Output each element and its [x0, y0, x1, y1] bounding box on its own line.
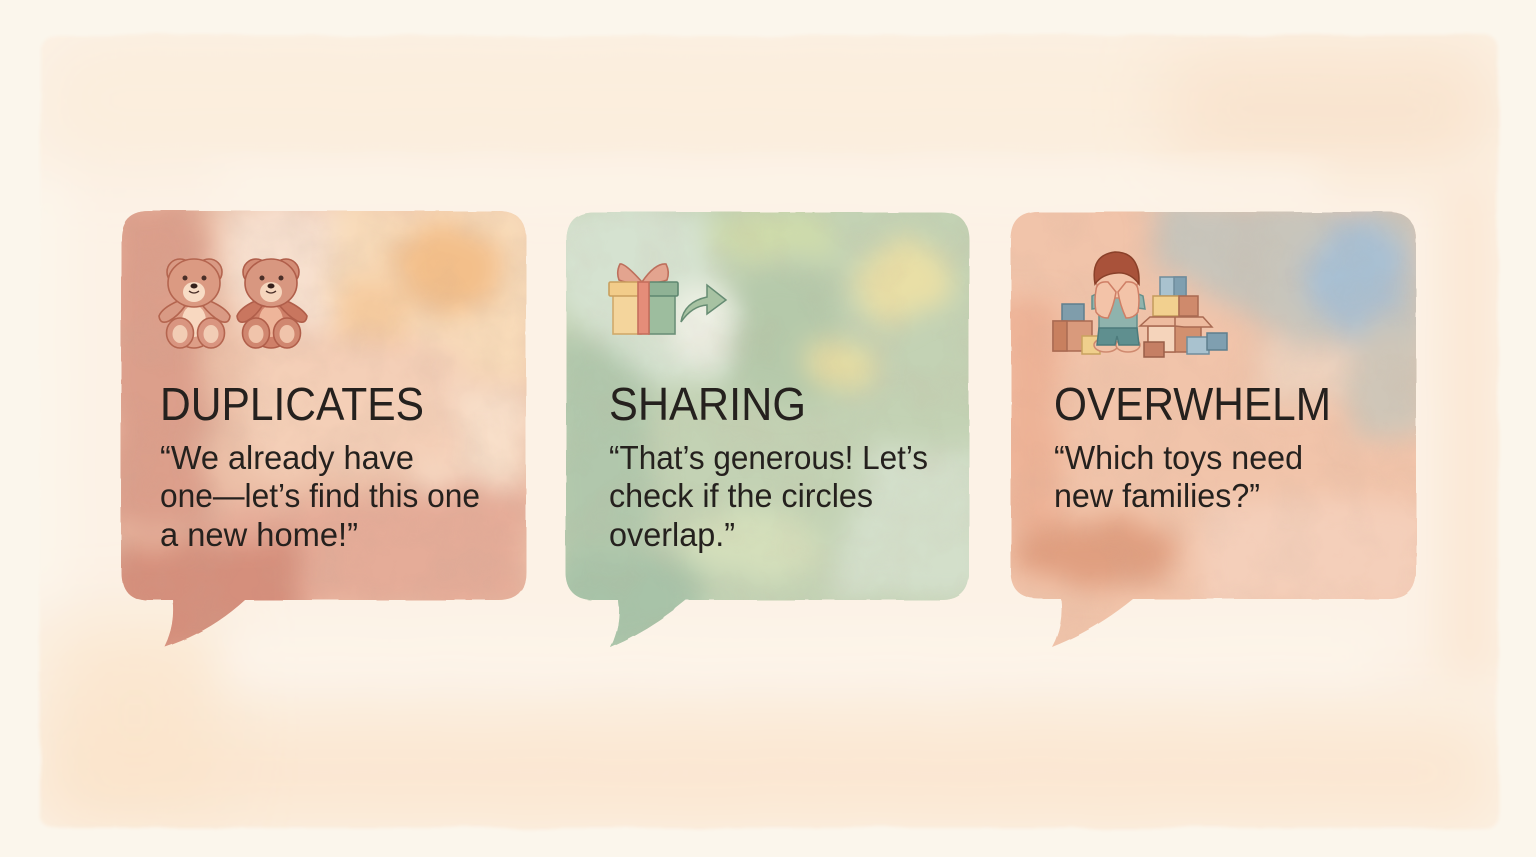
icon: left teddy bear — [159, 259, 230, 348]
heading: overwhelm: OVERWHELM — [1054, 378, 1331, 430]
icon: two teddy bears — [159, 259, 307, 348]
icon: gift bow — [618, 264, 668, 283]
quote: duplicates: a new home!” — [160, 516, 358, 553]
heading: sharing: SHARING — [609, 378, 806, 430]
icon: gift box — [609, 282, 678, 334]
icon: right teddy bear — [237, 259, 307, 348]
icon: open box — [1140, 317, 1212, 352]
card background: sharing speech bubble — [565, 212, 970, 647]
icon: left blocks — [1053, 304, 1100, 354]
card background: overwhelm speech bubble — [1010, 211, 1417, 647]
heading: duplicates: DUPLICATES — [160, 378, 424, 430]
icon: child — [1092, 252, 1145, 352]
panel: duplicates — [120, 210, 526, 646]
icon: stacked blocks — [1153, 277, 1198, 316]
quote: duplicates: “We already have — [160, 439, 414, 476]
quote: sharing: “That’s generous! Let’s — [609, 439, 928, 476]
card background: duplicates speech bubble — [120, 210, 526, 646]
panel: sharing — [565, 212, 970, 647]
quote: overwhelm: new families?” — [1054, 477, 1260, 514]
icon: small blocks — [1144, 333, 1227, 357]
icon: gift box with arrow — [609, 264, 726, 334]
panel: overwhelm — [1010, 211, 1417, 647]
icon: overwhelmed child with toy blocks — [1053, 252, 1227, 357]
quote: overwhelm: “Which toys need — [1054, 439, 1303, 476]
quote: sharing: check if the circles — [609, 477, 873, 514]
icon: arrow — [681, 285, 726, 322]
quote: duplicates: one—let’s find this one — [160, 477, 480, 514]
quote: sharing: overlap.” — [609, 516, 735, 553]
